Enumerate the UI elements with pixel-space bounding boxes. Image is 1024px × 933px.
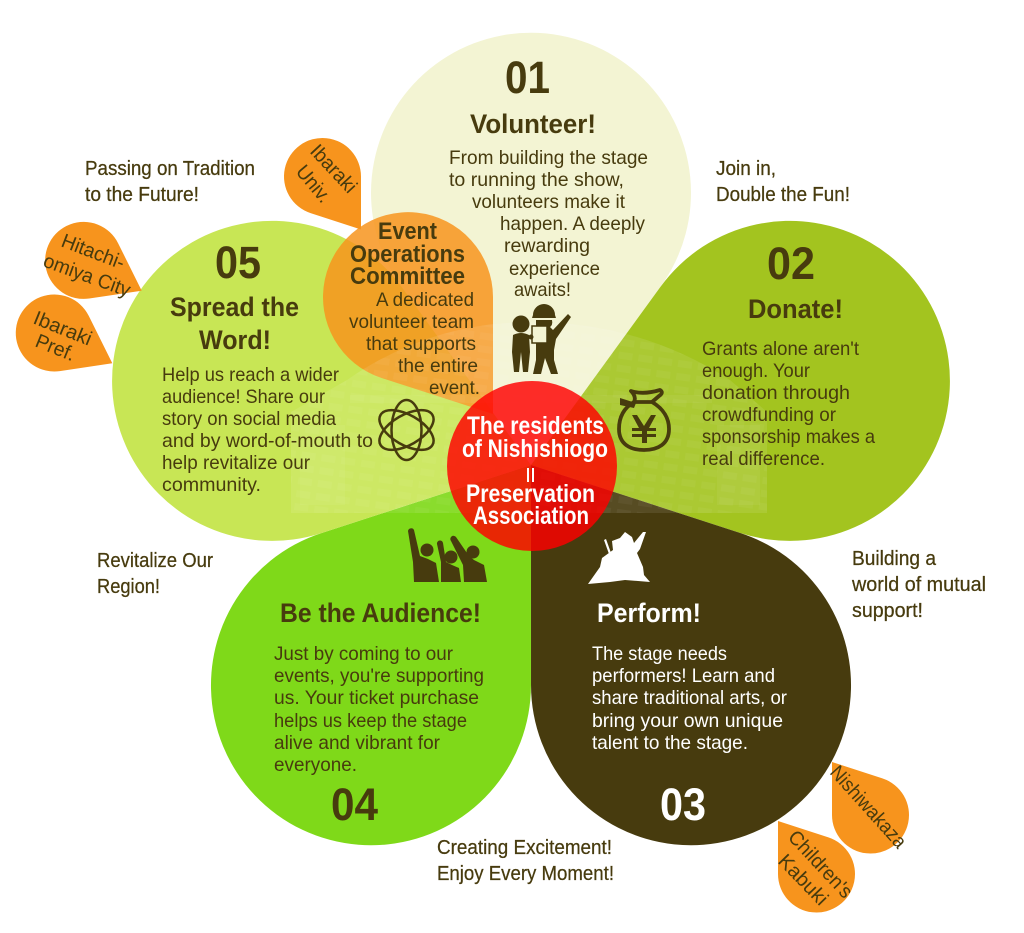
text block: event operations committee: Operations xyxy=(350,241,465,268)
text block: petal 04 Be the Audience: helps us keep the stage xyxy=(274,710,467,732)
petal 04 shape xyxy=(147,371,660,909)
text block: petal 03 Perform: bring your own unique xyxy=(592,710,783,732)
text block: event operations committee: event. xyxy=(429,377,480,399)
text block: event operations committee: that supports xyxy=(366,333,476,355)
tag text: Children's Kabuki: Kabuki xyxy=(773,850,832,910)
text block: petal 03 Perform xyxy=(592,598,787,830)
tag text: Ibaraki Univ.: Univ. xyxy=(291,161,335,207)
text block: petal 05 Spread the Word: 05 xyxy=(215,237,261,288)
watermark: theatre building xyxy=(291,322,767,513)
slogan: excitement: Creating Excitement! xyxy=(437,837,612,859)
text block: petal 04 Be the Audience: 04 xyxy=(331,779,378,830)
slogan: passing on tradition: to the Future! xyxy=(85,184,199,206)
tag text: Ibaraki Pref.: Ibaraki xyxy=(30,307,95,350)
slogan: revitalize: Region! xyxy=(97,576,160,598)
centre text xyxy=(462,412,608,530)
text block: petal 02 Donate: sponsorship makes a xyxy=(702,426,875,448)
text block: petal 05 Spread the Word: audience! Share our xyxy=(162,386,325,408)
petal 01 shape xyxy=(371,33,691,465)
text block: petal 02 Donate: crowdfunding or xyxy=(702,404,836,426)
icon: cheering audience xyxy=(408,528,487,582)
text block: event operations committee: volunteer team xyxy=(349,311,474,333)
text block: petal 03 Perform: Perform! xyxy=(597,598,701,628)
text block: petal 05 Spread the Word: Help us reach a wider xyxy=(162,364,339,386)
text block: petal 04 Be the Audience: Be the Audience! xyxy=(280,598,481,628)
text block: petal 01 Volunteer: Volunteer! xyxy=(470,109,596,139)
text block: petal 05 Spread the Word: community. xyxy=(162,474,261,496)
text block: petal 04 Be the Audience: alive and vibrant for xyxy=(274,732,440,754)
tag text: Hitachi-omiya City: omiya City xyxy=(40,250,133,302)
slogan: join in: Join in, xyxy=(716,158,776,180)
text block: petal 01 Volunteer: volunteers make it xyxy=(472,191,626,213)
slogan: passing on tradition xyxy=(85,158,255,206)
text block: petal 05 Spread the Word: and by word-of-mouth to xyxy=(162,430,373,452)
text block: petal 01 Volunteer: rewarding xyxy=(504,235,590,257)
petal 03 shape xyxy=(402,371,915,909)
tag text: Ibaraki Pref.: Pref. xyxy=(32,330,78,366)
text block: petal 02 Donate: Donate! xyxy=(748,294,843,324)
petal 05 shape xyxy=(70,179,580,617)
slogan: mutual support: world of mutual xyxy=(851,574,986,596)
tag text: Ibaraki Univ. xyxy=(291,140,361,207)
text block: petal 02 Donate: enough. Your xyxy=(702,360,810,382)
slogan: mutual support: support! xyxy=(852,600,923,622)
text block: petal 04 Be the Audience: us. Your ticket purchase xyxy=(274,687,479,709)
text block: petal 05 Spread the Word: story on social media xyxy=(162,408,336,430)
tag: Children's Kabuki drop xyxy=(778,821,855,913)
text block: petal 04 Be the Audience: everyone. xyxy=(274,754,357,776)
text block: petal 02 Donate: real difference. xyxy=(702,448,825,470)
tag: Hitachiomiya City drop xyxy=(45,222,142,299)
text block: petal 03 Perform: talent to the stage. xyxy=(592,732,748,754)
text block: petal 04 Be the Audience: Just by coming to our xyxy=(274,643,453,665)
text block: petal 01 Volunteer: From building the stage xyxy=(449,147,648,169)
slogan: mutual support xyxy=(851,548,986,622)
text block: petal 02 Donate: donation through xyxy=(702,382,850,404)
text block: petal 05 Spread the Word xyxy=(162,237,373,496)
slogan: revitalize xyxy=(97,550,213,598)
centre text: Association xyxy=(473,502,589,530)
slogan: join in xyxy=(716,158,850,206)
text block: petal 04 Be the Audience xyxy=(274,598,484,830)
text block: petal 05 Spread the Word: Word! xyxy=(199,325,271,355)
text block: petal 01 Volunteer: to running the show, xyxy=(449,169,624,191)
text block: petal 04 Be the Audience: events, you're supporting xyxy=(274,665,484,687)
text block: event operations committee: A dedicated xyxy=(376,289,474,311)
tag text: Nishiwakaza: Nishiwakaza xyxy=(825,762,911,853)
text block: petal 03 Perform: share traditional arts, or xyxy=(592,687,787,709)
text block: petal 02 Donate: 02 xyxy=(767,238,815,289)
text block: petal 03 Perform: 03 xyxy=(660,779,706,830)
slogan: passing on tradition: Passing on Tradition xyxy=(85,158,255,180)
icon: atom xyxy=(373,400,440,460)
text block: petal 05 Spread the Word: help revitalize our xyxy=(162,452,310,474)
tag: Ibaraki Pref. drop xyxy=(16,295,112,372)
text block: petal 01 Volunteer: experience xyxy=(509,258,600,280)
slogan: excitement: Enjoy Every Moment! xyxy=(437,863,614,885)
panel: event operations committee drop xyxy=(323,212,493,414)
icon: volunteers with hard hat xyxy=(512,304,571,374)
slogan: revitalize: Revitalize Our xyxy=(97,550,213,572)
text block: petal 02 Donate: Grants alone aren't xyxy=(702,338,860,360)
centre text: Preservation xyxy=(466,480,595,508)
text block: event operations committee: the entire xyxy=(398,355,478,377)
text block: event operations committee xyxy=(349,218,480,399)
tag text: Children's Kabuki: Children's xyxy=(783,826,857,903)
centre text: of Nishishiogo xyxy=(462,435,608,463)
text block: petal 03 Perform: performers! Learn and xyxy=(592,665,775,687)
text block: petal 01 Volunteer xyxy=(449,52,648,301)
centre red circle xyxy=(447,381,617,551)
text block: petal 03 Perform: The stage needs xyxy=(592,643,727,665)
tag text: Ibaraki Univ.: Ibaraki xyxy=(305,140,361,198)
icon: money bag with yen xyxy=(619,390,669,450)
text block: petal 05 Spread the Word: Spread the xyxy=(170,292,299,322)
petal 02 shape xyxy=(482,179,992,617)
slogan: excitement xyxy=(437,837,614,885)
slogan: join in: Double the Fun! xyxy=(716,184,850,206)
text block: petal 01 Volunteer: 01 xyxy=(505,52,550,103)
text block: petal 02 Donate xyxy=(702,238,875,470)
text block: event operations committee: Committee xyxy=(350,263,465,290)
tag text: Hitachi-omiya City: Hitachi- xyxy=(58,230,128,274)
text block: petal 01 Volunteer: awaits! xyxy=(514,279,571,301)
tag: Ibaraki Univ. drop xyxy=(284,138,361,230)
tag: Nishiwakaza drop xyxy=(832,762,909,854)
text block: event operations committee: Event xyxy=(378,218,437,245)
text block: petal 01 Volunteer: happen. A deeply xyxy=(500,213,645,235)
slogan: mutual support: Building a xyxy=(852,548,937,570)
centre text: The residents xyxy=(467,412,604,440)
icon: kabuki performer xyxy=(588,532,650,584)
